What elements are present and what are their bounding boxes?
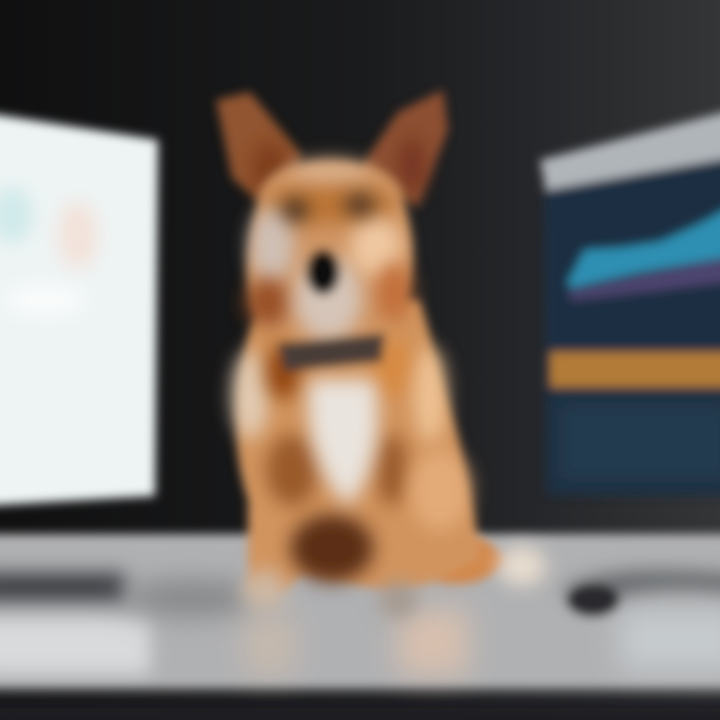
ear left [216,92,302,210]
lower cheek left [246,278,290,326]
desk bright area left [0,618,150,674]
forehead [290,160,370,184]
left shoulder patch [232,351,268,439]
chart: purple line [568,256,720,300]
body [236,300,478,592]
screen body [544,150,720,496]
panel: right dashboard screen [540,108,720,496]
dog reflection right [398,610,468,675]
chart: teal area [568,202,720,288]
muzzle [294,256,362,340]
lower left fur shadow [266,434,318,506]
paw left [242,570,286,610]
desk [0,534,720,720]
dog reflection left [245,615,295,675]
tail [430,525,505,584]
tail tip [498,546,546,586]
cheek right [350,218,402,278]
dog [216,90,546,618]
cheek left [250,207,294,283]
desk shadow band right [560,570,720,610]
mouse [566,583,620,617]
eye left [281,197,309,223]
brow band [264,187,396,223]
desk front edge [0,700,720,720]
head [246,160,413,339]
white chest [308,380,378,505]
screen header bar [540,108,720,190]
nose [306,249,340,295]
desk top surface [0,534,720,689]
ear left inner [252,142,288,198]
right shoulder peach [414,347,446,443]
right shoulder orange [372,338,412,398]
lower cheek right [376,262,412,322]
eye right [344,192,376,218]
lower right fur shadow [376,434,408,506]
lower table [560,405,720,480]
collar [278,333,385,372]
orange bar [550,352,720,387]
right haunch [410,450,470,530]
desk bright area right [620,610,720,670]
ear right inner [398,137,426,193]
ear right [362,90,448,208]
shadow extension [120,582,260,614]
paw right [378,582,418,618]
belly shadow [290,514,374,582]
panel: left white screen [0,112,158,506]
left chest orange [265,344,301,400]
desk shadow band left [0,572,125,602]
